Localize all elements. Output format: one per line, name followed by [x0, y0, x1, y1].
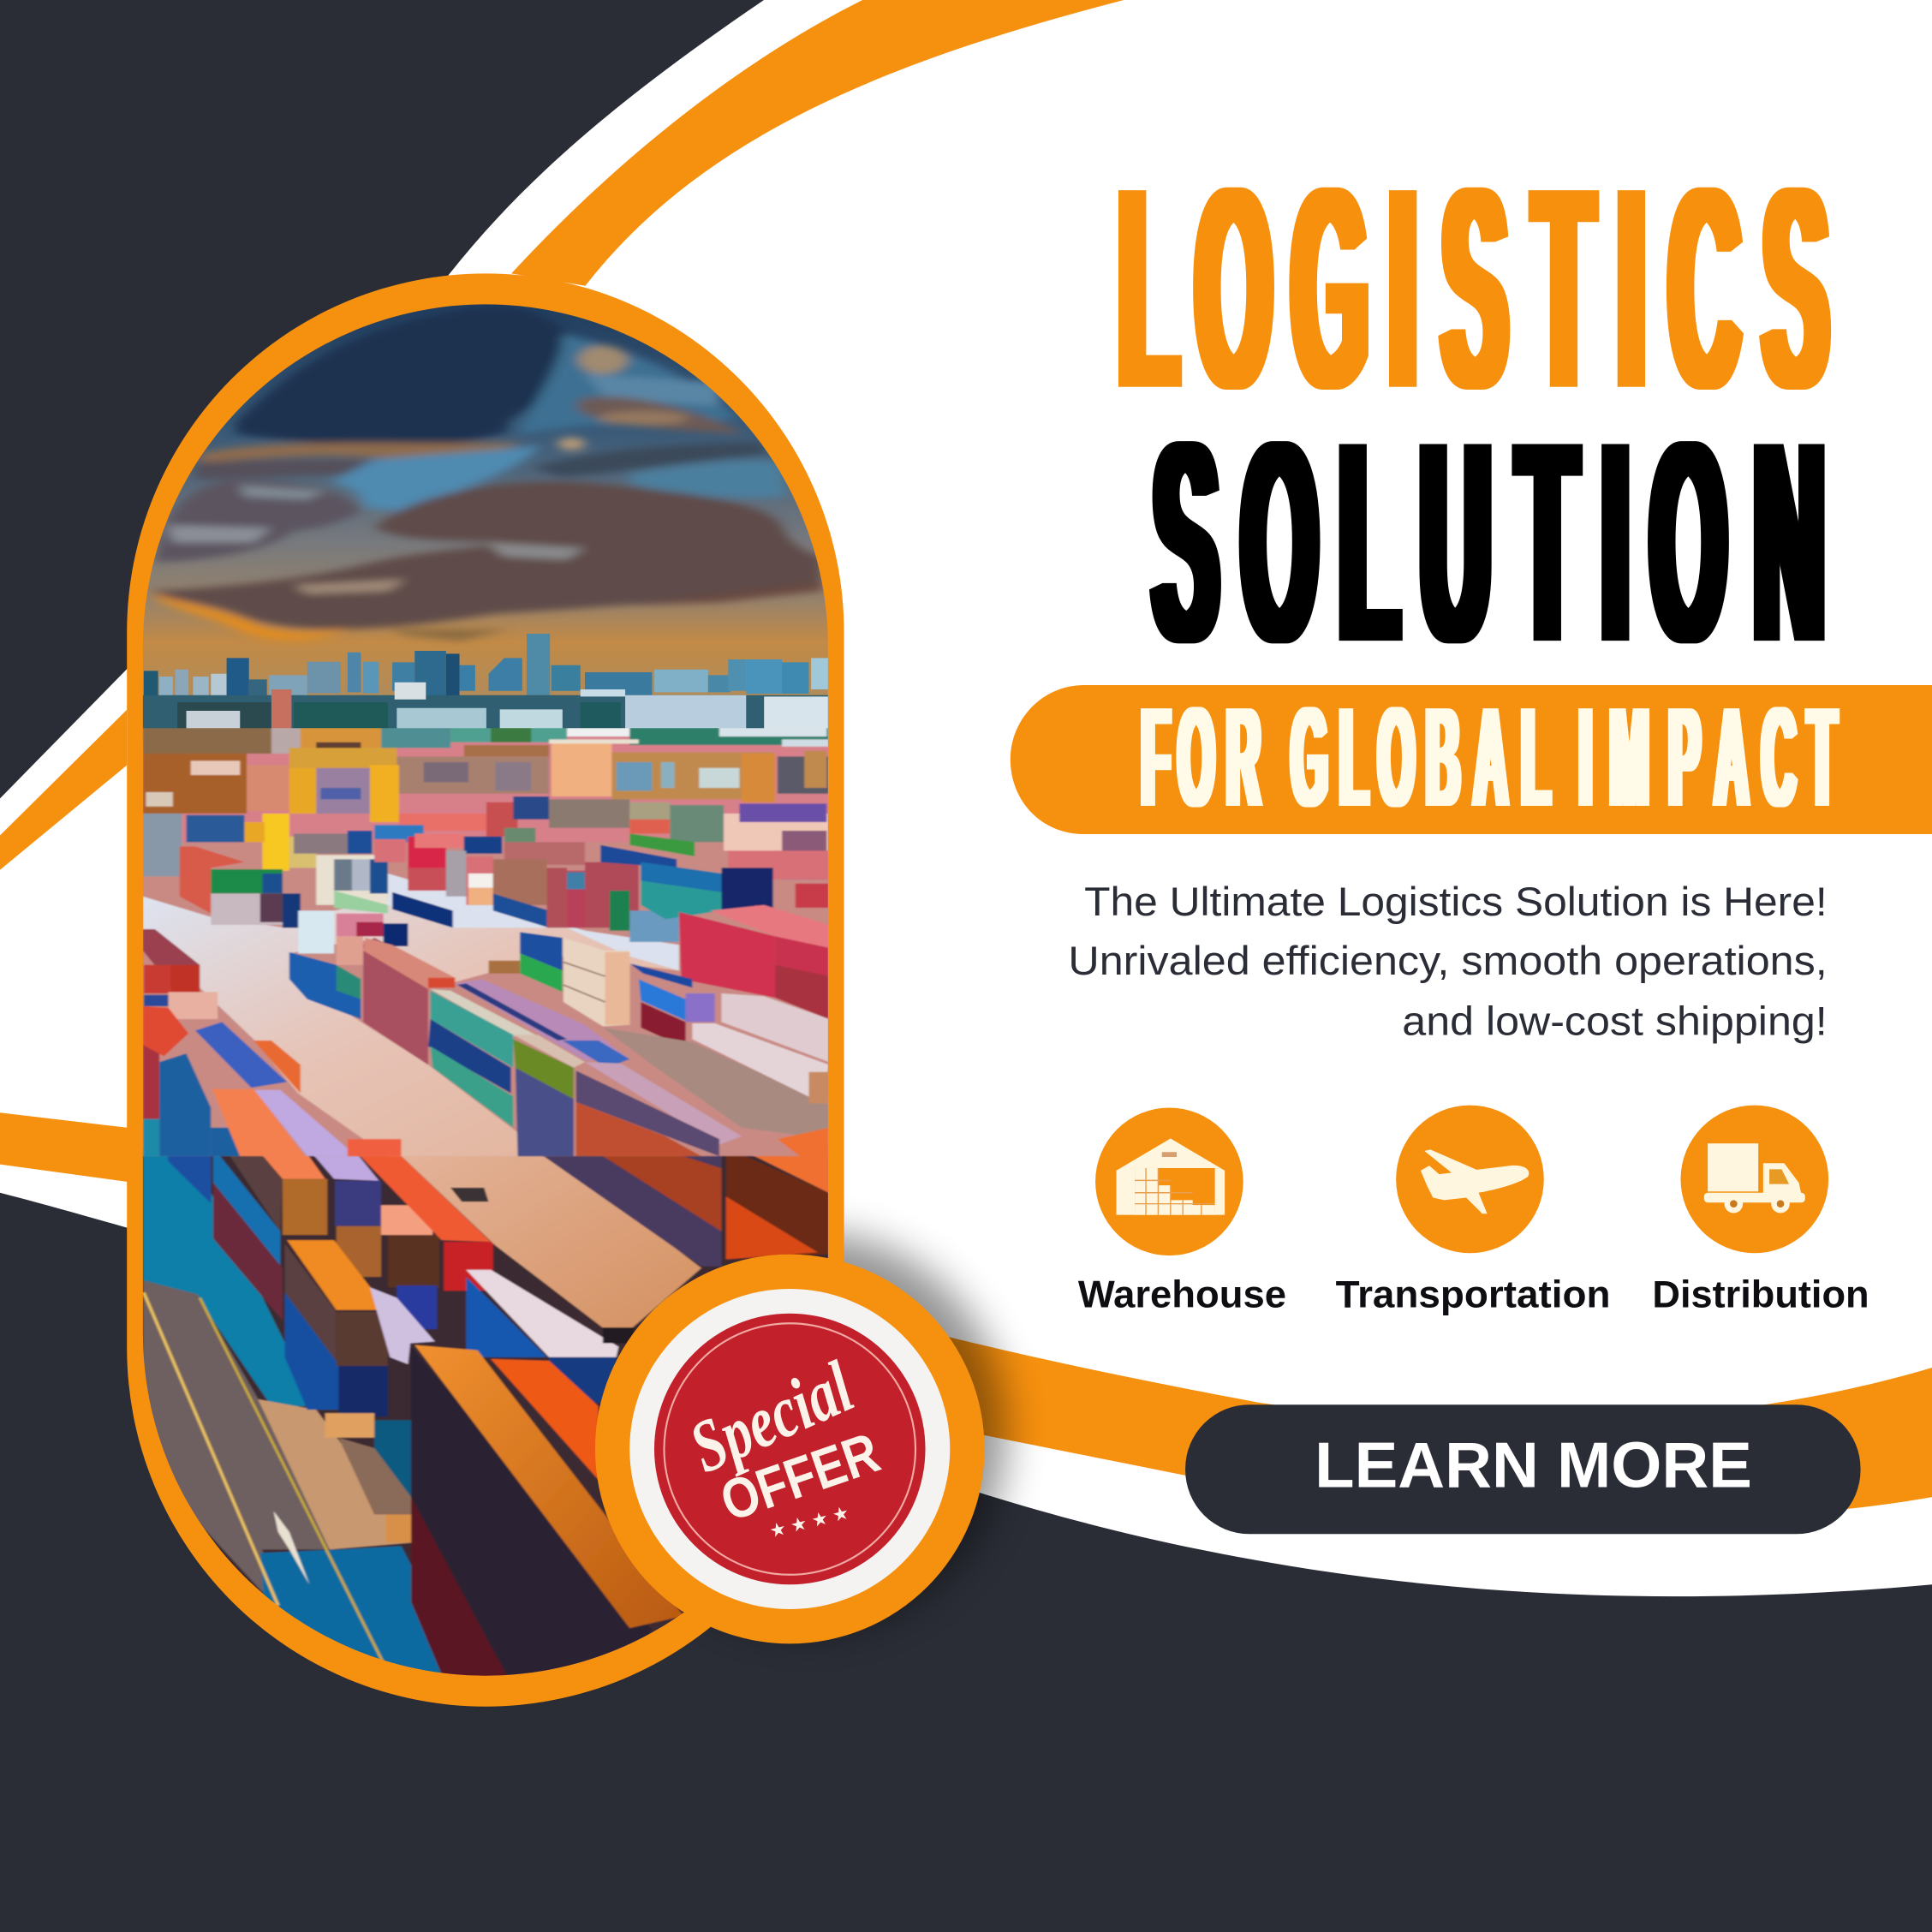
icon labels: [1078, 1274, 1869, 1316]
photo: container port at sunset: [137, 291, 839, 1696]
orange band: left lower: [0, 1112, 135, 1183]
badge outer ring: [595, 1255, 985, 1643]
orange swoosh: top: [511, 0, 1124, 286]
orange subtitle bar: [1011, 685, 1932, 834]
lower left containers: [143, 929, 402, 1156]
yard base: [142, 841, 828, 1158]
subtitle: for global impact: FOR GLOBAL IMPACT: [1142, 678, 1836, 837]
button: learn more: LEARN MORE: [1315, 1429, 1752, 1501]
red block right: [679, 905, 829, 1019]
right boxes: [520, 932, 829, 1156]
yard: containers and road: [137, 728, 839, 1156]
label: distribution: Distribution: [1652, 1274, 1869, 1316]
small boxes: [289, 892, 520, 1019]
city and cranes: [137, 728, 839, 876]
badge red seal: [654, 1314, 926, 1584]
label: transportation: Transportation: [1336, 1274, 1610, 1316]
dark shape: top left: [0, 0, 764, 798]
left back stacks: [180, 831, 388, 927]
back row containers: [399, 796, 829, 908]
body line 1: The Ultimate Logistics Solution is Here!: [1084, 880, 1828, 925]
sky: [137, 291, 839, 719]
badge: special offer: [595, 1255, 985, 1643]
road: [143, 897, 679, 1156]
pale yard: [388, 874, 679, 970]
photo base: [143, 690, 828, 1676]
body line 2: Unrivaled efficiency, smooth operations,: [1068, 939, 1828, 984]
skyline and city: [137, 634, 839, 741]
badge white ring: [629, 1289, 950, 1609]
body line 3: and low-cost shipping!: [1402, 999, 1828, 1045]
icon: warehouse: [1095, 1107, 1243, 1255]
dark shape: bottom: [0, 1193, 1932, 1932]
icon: truck: [1680, 1106, 1828, 1253]
orange band: right: [949, 1337, 1932, 1518]
foreground: lower yard: [137, 1148, 839, 1696]
badge text: special: Special: [678, 1345, 864, 1488]
button: learn more: [1185, 1404, 1861, 1534]
body text: [1068, 880, 1828, 1045]
title: logistics: LOGISTICS: [1118, 128, 1828, 448]
badge text: offer: OFFER: [713, 1421, 887, 1534]
photo frame: orange pill: [127, 273, 844, 1707]
orange swoosh: left upper: [0, 710, 127, 870]
long container rows: [363, 938, 742, 1156]
soft shadow behind badge: [607, 1232, 1006, 1631]
middle back stacks: [374, 825, 773, 942]
title: solution: SOLUTION: [1154, 382, 1824, 701]
icon: airplane: [1396, 1106, 1544, 1253]
badge stars: ★★★★: [767, 1501, 851, 1541]
badge thin ring: [665, 1323, 915, 1575]
label: warehouse: Warehouse: [1078, 1274, 1286, 1316]
